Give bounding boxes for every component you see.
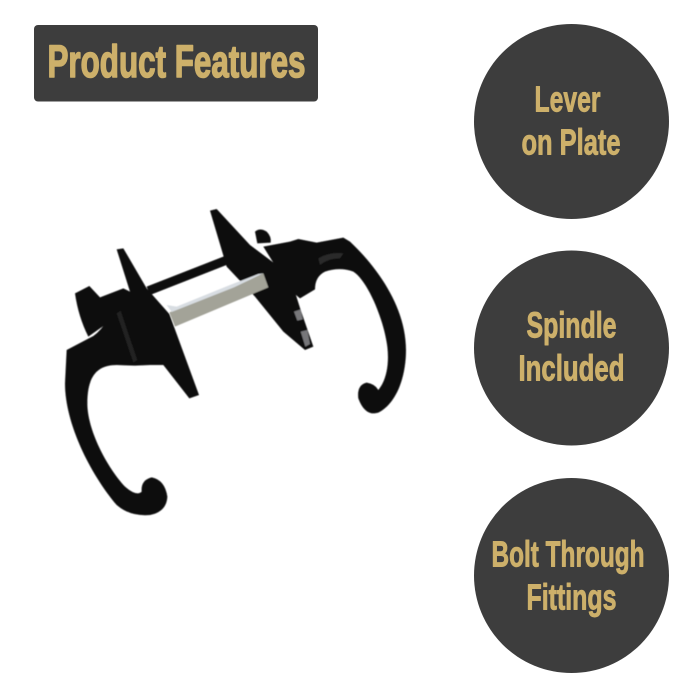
bolt rod: [147, 253, 235, 295]
bolt knob: [255, 229, 271, 243]
feature circle: Spindle Included: [474, 250, 669, 446]
spindle: [169, 273, 268, 327]
near bolt head: [75, 286, 133, 337]
feature circle: Lever on Plate: Lever: [534, 78, 600, 120]
product photo: black lever door handle set: [65, 209, 406, 515]
far backplate: [210, 209, 313, 350]
heading: Product Features: Product Features: [48, 36, 306, 87]
feature circle: Bolt Through Fittings: [474, 478, 669, 673]
feature circle: Spindle Included: Spindle: [526, 304, 616, 346]
feature circle: Lever on Plate: on Plate: [522, 122, 620, 162]
near collar sheen: [117, 311, 137, 363]
far handle sheen: [318, 253, 343, 265]
far handle: [263, 238, 406, 413]
near handle: [65, 292, 167, 515]
far plate highlights: [294, 309, 310, 347]
feature circle: Bolt Through Fittings: Fittings: [526, 576, 616, 618]
heading: Product Features: [34, 25, 318, 102]
near backplate: [117, 248, 199, 398]
feature circle: Spindle Included: Included: [518, 348, 624, 388]
feature circle: Lever on Plate: [474, 24, 669, 219]
